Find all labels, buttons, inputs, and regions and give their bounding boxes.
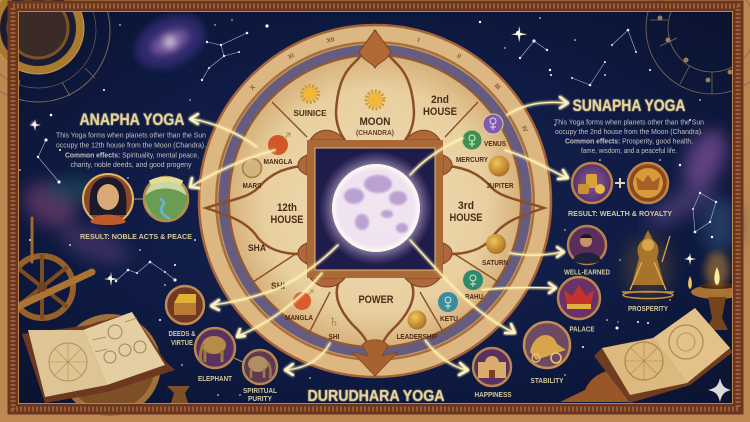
label: sha: SHA bbox=[248, 243, 266, 254]
rim numerals: IV bbox=[520, 125, 529, 134]
rim numerals: I bbox=[417, 37, 420, 44]
description: sunapha bbox=[554, 120, 704, 155]
zodiac chart: top right bbox=[646, 0, 750, 94]
label: 3rd: 3rd bbox=[458, 200, 474, 212]
label: elephant: ELEPHANT bbox=[198, 374, 232, 383]
label: spiritual purity: PURITY bbox=[248, 394, 272, 403]
label: spiritual purity: SPIRITUAL bbox=[243, 386, 277, 395]
book: left bbox=[22, 312, 175, 403]
arrow: to sunapha title bbox=[507, 97, 568, 115]
arrow: to elephant bbox=[237, 273, 322, 337]
icon: well-earned man bbox=[568, 226, 606, 264]
label: shi lower: SHI bbox=[328, 334, 340, 341]
label: shi: SHI bbox=[271, 281, 285, 292]
description: anapha: This Yoga forms when planets other than the Sun bbox=[56, 132, 206, 140]
label: house top: HOUSE bbox=[423, 106, 457, 118]
description: anapha: charity, noble deeds, and good progeny bbox=[70, 162, 192, 169]
arrow: to chariot bbox=[410, 240, 515, 333]
sparkle watermark bbox=[708, 378, 731, 402]
label: mars: MARS bbox=[242, 183, 262, 190]
description: sunapha: occupy the 2nd house from the Moon (Chandra). bbox=[555, 129, 703, 136]
rim numerals: III bbox=[493, 83, 502, 91]
icon: spiritual elephant bbox=[243, 350, 277, 384]
description: anapha: occupy the 12th house from the Moon (Chandra). bbox=[56, 142, 206, 150]
inner parchment bbox=[229, 55, 521, 347]
description: sunapha: fame, wisdom, and a peaceful life. bbox=[581, 148, 677, 155]
label: jupiter: JUPITER bbox=[486, 183, 514, 190]
arrow: to anapha icons bbox=[190, 150, 275, 188]
arrow: to well-earned bbox=[510, 247, 564, 257]
rim numerals: XI bbox=[287, 52, 296, 61]
label: deeds and virtue: DEEDS & bbox=[168, 329, 196, 338]
panel: sunapha yoga bbox=[524, 96, 704, 385]
nebula: left purple bbox=[16, 174, 134, 270]
connector bbox=[234, 358, 243, 362]
panel: durudhara yoga bbox=[166, 286, 512, 405]
nebula: right purple bbox=[641, 123, 738, 253]
plus sign bbox=[615, 178, 625, 188]
description: sunapha: This Yoga forms when planets other than the Sun bbox=[554, 120, 704, 126]
label: palace: PALACE bbox=[570, 324, 594, 334]
arrow: to chest bbox=[211, 245, 338, 310]
moon bbox=[319, 151, 433, 265]
rim numerals bbox=[249, 36, 529, 134]
description: anapha: Common effects: Spirituality, mental peace, bbox=[65, 152, 199, 160]
rim bbox=[199, 25, 551, 377]
description: sunapha: Common effects: Prosperity, good health, bbox=[565, 138, 693, 146]
label: mangla: MANGLA bbox=[264, 159, 292, 166]
icon: palace crown bbox=[558, 277, 600, 319]
astrolabe: top left bbox=[0, 0, 110, 102]
arrows: gold connectors bbox=[190, 97, 568, 375]
centre lobes bbox=[298, 130, 452, 287]
label: mercury: MERCURY bbox=[456, 157, 488, 164]
label: saturn: SATURN bbox=[482, 260, 508, 267]
panel: anapha yoga bbox=[56, 110, 206, 241]
label: leadership: LEADERSHIP bbox=[396, 334, 438, 341]
description: anapha bbox=[56, 132, 206, 169]
label: venus: VENUS bbox=[484, 141, 506, 148]
icon: crown medallion bbox=[628, 163, 668, 203]
arrow: moon to mercury bbox=[410, 138, 463, 175]
icon: palace happiness bbox=[473, 348, 511, 386]
planet: mars bbox=[242, 158, 262, 178]
label: moon: MOON bbox=[360, 116, 391, 128]
planet: rahu bbox=[463, 270, 483, 290]
label: chandra: (CHANDRA) bbox=[356, 128, 394, 137]
title: anapha yoga: ANAPHA YOGA bbox=[80, 110, 184, 129]
label: happiness: HAPPINESS bbox=[474, 390, 512, 399]
label: ketu: KETU bbox=[440, 316, 458, 323]
house dividers bbox=[253, 102, 500, 335]
label: house right: HOUSE bbox=[450, 212, 482, 224]
result: anapha: RESULT: NOBLE ACTS & PEACE bbox=[80, 232, 192, 241]
label: mangla lower: MANGLA bbox=[285, 315, 313, 322]
label: 12th: 12th bbox=[277, 202, 297, 214]
purple band bbox=[218, 44, 532, 358]
arrow: to anapha title bbox=[190, 114, 257, 147]
title: durudhara yoga: DURUDHARA YOGA bbox=[308, 388, 445, 405]
title: sunapha yoga: SUNAPHA YOGA bbox=[572, 96, 686, 115]
label: power: POWER bbox=[358, 294, 394, 306]
planet: mangla bbox=[268, 133, 290, 155]
label: 2nd house: 2nd bbox=[431, 94, 449, 106]
icon: landscape bbox=[144, 177, 188, 221]
sparkles: bright stars bbox=[29, 26, 696, 286]
icon: chariot bbox=[524, 322, 570, 368]
rim numerals: XII bbox=[326, 36, 336, 45]
icon: saturn glyph: ♄ bbox=[328, 313, 340, 330]
arrow: to spiritual purity bbox=[285, 343, 330, 375]
planet: leadership bbox=[408, 310, 426, 330]
planet: venus bbox=[483, 114, 503, 134]
lamp: right bbox=[688, 252, 743, 330]
sun icon: moon chamber bbox=[366, 92, 384, 108]
armillary wheel: left bbox=[11, 218, 92, 318]
icon: treasure chest bbox=[166, 286, 204, 324]
label: deeds and virtue: VIRTUE bbox=[171, 338, 193, 347]
label: deeds and virtue bbox=[168, 329, 196, 347]
right ogee bbox=[443, 165, 544, 254]
arrow: to palace bbox=[482, 283, 556, 293]
arrow: to happiness bbox=[425, 340, 468, 375]
label: prosperity: PROSPERITY bbox=[628, 304, 668, 313]
icon: coins bbox=[572, 163, 612, 203]
icon: elephant bbox=[195, 328, 235, 368]
arrow: to coins bbox=[505, 150, 568, 179]
book: right bbox=[560, 308, 733, 403]
planet: ketu bbox=[438, 292, 458, 312]
centre frame bbox=[311, 144, 439, 274]
icon: golden deity bbox=[622, 230, 674, 300]
result: sunapha: RESULT: WEALTH & ROYALTY bbox=[568, 209, 672, 218]
constellations bbox=[37, 29, 717, 282]
top ogee bbox=[336, 30, 414, 140]
label: stability: STABILITY bbox=[530, 376, 564, 385]
icon: noble portrait bbox=[83, 174, 133, 225]
rim numerals: II bbox=[455, 53, 462, 61]
planet: mercury bbox=[462, 130, 482, 150]
label: rahu: RAHU bbox=[465, 294, 483, 301]
astrolabe disc: behind left book bbox=[62, 317, 158, 413]
label: house left: HOUSE bbox=[270, 214, 304, 226]
label: suinice: SUINICE bbox=[294, 108, 327, 118]
galaxy: spiral bbox=[127, 5, 213, 79]
sun icon: suinice bbox=[302, 86, 318, 102]
planet: mangla lower bbox=[293, 290, 313, 310]
planet: jupiter bbox=[488, 156, 510, 176]
rim numerals: X bbox=[249, 83, 257, 92]
pot: bottom left bbox=[167, 386, 190, 403]
connector bbox=[130, 198, 150, 200]
left ogee bbox=[206, 165, 307, 254]
label: well-earned: WELL-EARNED bbox=[564, 268, 610, 276]
wheel: zodiac chart bbox=[199, 25, 551, 377]
label: spiritual purity bbox=[243, 386, 277, 403]
bottom ogee bbox=[337, 280, 413, 376]
planet: saturn bbox=[486, 234, 506, 254]
